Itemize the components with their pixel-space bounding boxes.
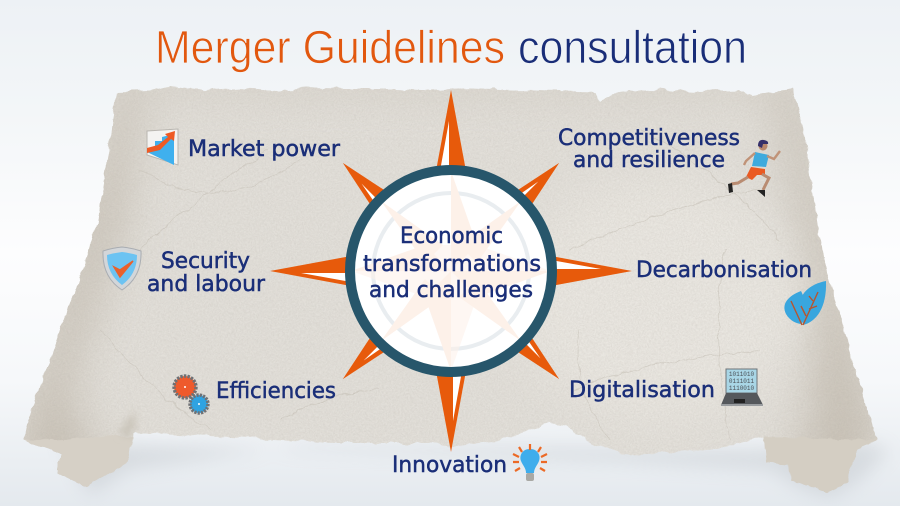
spike: south-east [510, 330, 568, 388]
icon: laptop with binary: 1110010 [729, 385, 754, 392]
spike: north [436, 90, 466, 171]
icon: runner [728, 140, 780, 197]
icon: leaves [784, 281, 826, 325]
item: efficiencies [174, 376, 336, 413]
spike: south-west [334, 330, 392, 388]
item: innovation: Innovation [392, 452, 507, 478]
right fold [763, 436, 866, 488]
parchment lighter centre [776, 261, 802, 299]
item: competitiveness and resilience: Competitiveness [558, 125, 740, 151]
parchment grain [76, 86, 829, 455]
icon: laptop with binary [721, 369, 763, 406]
spike: north-east [510, 154, 568, 212]
centre text: and challenges [369, 277, 533, 303]
spike: west [270, 256, 351, 286]
centre text [363, 223, 541, 303]
title: consultation [518, 21, 747, 73]
icon: laptop with binary: 0111011 [729, 378, 754, 385]
item: decarbonisation [636, 257, 826, 325]
item: market power [147, 129, 341, 165]
paper shadow [60, 440, 890, 498]
item: digitalisation [569, 369, 763, 406]
faint inner compass [351, 171, 551, 371]
parchment map lines [100, 130, 780, 440]
item: security and labour: Security [161, 248, 250, 274]
item: digitalisation: Digitalisation [569, 377, 715, 403]
centre text: transformations [363, 251, 541, 277]
spike: north-west [334, 154, 392, 212]
parchment map [23, 86, 878, 493]
item: security and labour: and labour [147, 271, 266, 297]
icon: gears [174, 376, 208, 413]
icon: light bulb [513, 444, 547, 481]
spike: east [551, 256, 632, 286]
compass rose [270, 90, 632, 452]
title [155, 21, 747, 73]
central ring [350, 170, 552, 372]
central disc [350, 170, 552, 372]
item: innovation [392, 444, 547, 481]
left fold [22, 436, 134, 488]
item: decarbonisation: Decarbonisation [636, 257, 812, 283]
item: security and labour [103, 247, 266, 297]
item: competitiveness and resilience [558, 125, 780, 197]
title: Merger Guidelines [155, 21, 505, 73]
centre text: Economic [400, 223, 503, 249]
item: efficiencies: Efficiencies [216, 378, 336, 404]
left fold crease shadow [118, 414, 138, 438]
icon: laptop with binary: 1011010 [729, 371, 754, 378]
spike: south [436, 371, 466, 452]
item: market power: Market power [188, 136, 341, 162]
icon: growth chart [147, 129, 178, 165]
icon: shield [103, 247, 141, 290]
item: competitiveness and resilience: and resilience [573, 147, 725, 173]
